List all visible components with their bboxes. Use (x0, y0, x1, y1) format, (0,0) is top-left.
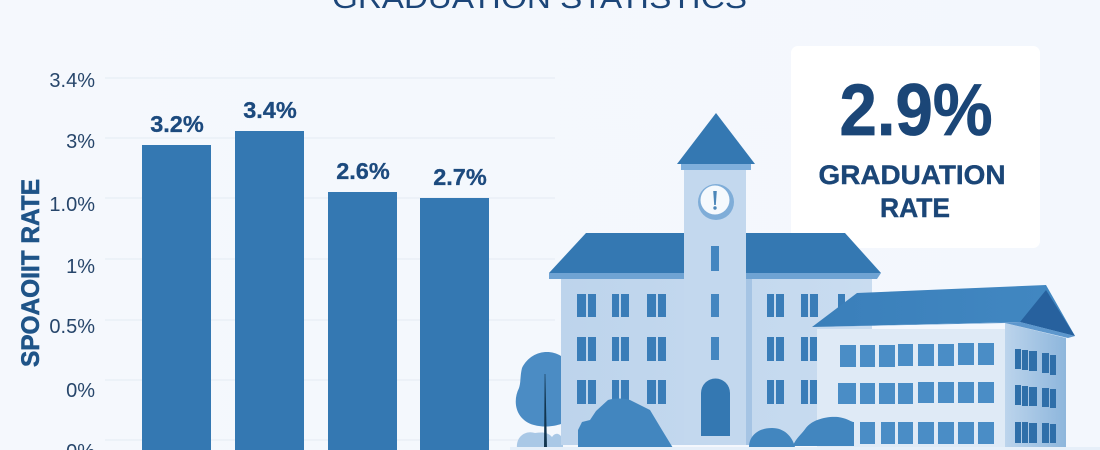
y-axis tick labels: 1% (66, 256, 95, 278)
icon: tree (516, 352, 563, 448)
bar value labels: 3.4% (243, 97, 297, 123)
illustration: campus buildings (510, 113, 1100, 450)
y-axis tick labels (49, 70, 95, 450)
callout value: 2.9% (840, 70, 992, 151)
y-axis tick labels: 3.4% (49, 70, 95, 92)
tower windows (711, 246, 719, 360)
front windows (838, 343, 994, 444)
y-axis tick labels: 0.5% (49, 316, 95, 338)
y-axis title: SPOAOIIT RATE (17, 179, 45, 367)
tower door (701, 378, 730, 436)
bar value labels: 2.6% (336, 158, 390, 184)
icon: clock (698, 184, 734, 220)
bar value labels: 2.7% (433, 164, 487, 190)
bar chart: graduation rate by year (17, 70, 555, 450)
tower roof (677, 113, 755, 164)
windows: left wing (577, 294, 666, 404)
secondary roof (812, 285, 1075, 336)
main building (549, 233, 881, 445)
secondary building (793, 285, 1075, 447)
side windows (1015, 349, 1056, 443)
callout label: RATE (880, 193, 950, 223)
main roof (549, 233, 881, 273)
ground (510, 447, 1100, 450)
windows: right wing (767, 294, 845, 404)
callout label (818, 160, 1006, 223)
bar value labels (150, 97, 487, 190)
y-axis tick labels: 0% (66, 380, 95, 402)
front shrub (793, 417, 854, 446)
clock tower (677, 113, 755, 445)
bar value labels: 3.2% (150, 111, 204, 137)
y-axis tick labels: 1.0% (49, 194, 95, 216)
callout: graduation rate (791, 46, 1040, 248)
shrubs (578, 398, 858, 448)
y-axis tick labels: 3% (66, 131, 95, 153)
bars (142, 131, 489, 450)
callout label: GRADUATION (818, 160, 1006, 190)
